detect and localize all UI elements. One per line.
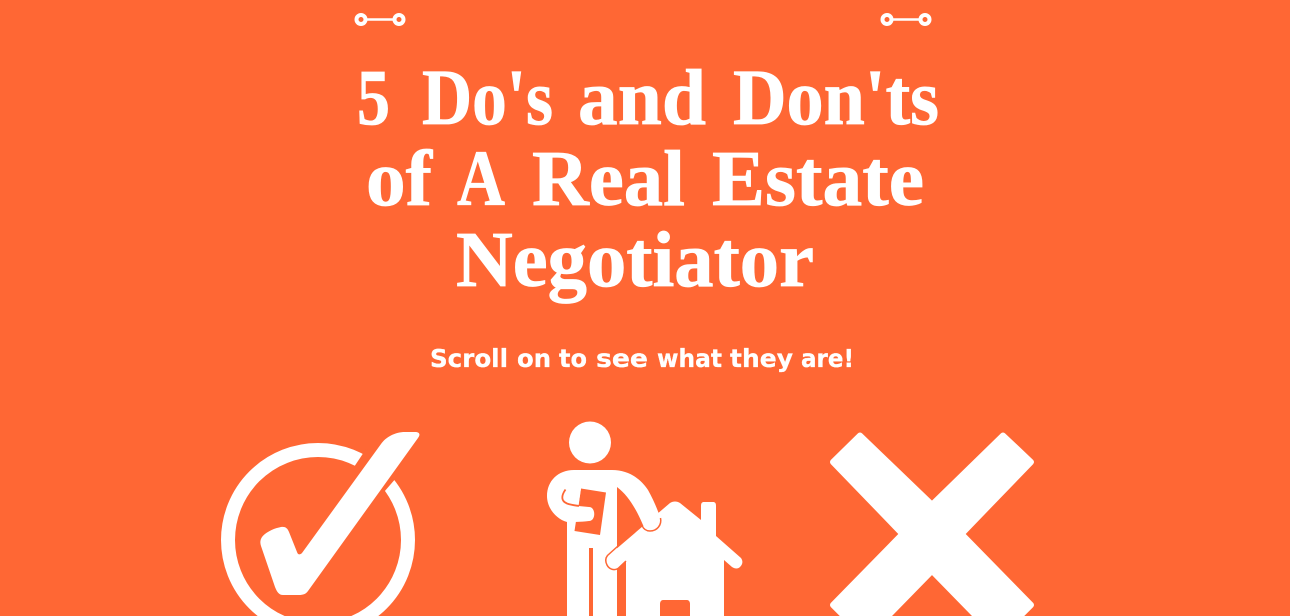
subtitle: to [559, 344, 587, 373]
title: Negotiator [456, 217, 814, 304]
subtitle: on [517, 344, 551, 373]
subtitle [430, 344, 854, 373]
icon: check mark in circle [228, 432, 419, 616]
subtitle: see [596, 344, 648, 373]
arm crease [562, 490, 579, 506]
house eave outline [606, 546, 626, 570]
title: of [366, 136, 434, 223]
title: Real [532, 136, 685, 223]
icon: left connector ornament [356, 15, 404, 24]
house [606, 502, 742, 616]
person left arm [547, 470, 594, 522]
person torso and leg [567, 480, 617, 616]
title: 5 [357, 55, 390, 142]
person right arm [585, 470, 660, 530]
icon: X mark [833, 436, 1031, 616]
subtitle: they [730, 344, 793, 373]
icon: right connector ornament [882, 15, 930, 24]
subtitle: Scroll [430, 344, 508, 373]
subtitle: are! [801, 344, 854, 373]
subtitle: what [657, 344, 722, 373]
icon: agent with house [547, 422, 742, 616]
person head [569, 422, 611, 464]
title: Don'ts [733, 55, 939, 142]
title: Estate [712, 136, 924, 223]
title [357, 55, 939, 304]
title: A [457, 136, 505, 223]
title: Do's [422, 55, 553, 142]
clipboard [574, 488, 606, 535]
hand outline [642, 518, 661, 531]
title: and [578, 55, 706, 142]
